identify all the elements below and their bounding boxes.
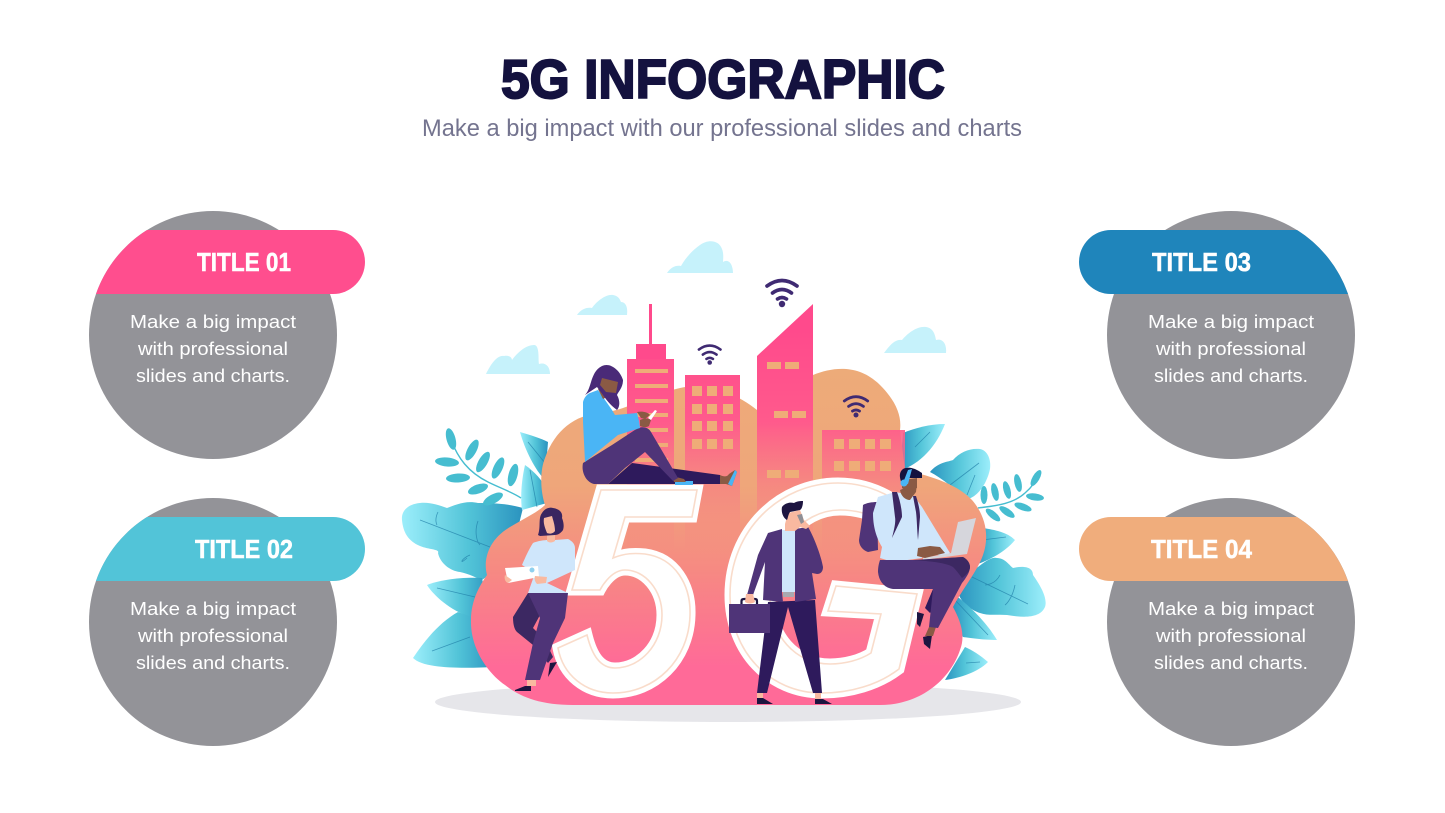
leaves: right [900,424,1046,680]
panel: title 02 [89,498,365,746]
icon: wifi large [767,280,797,307]
subtitle: Make a big impact with our professional slides and charts [422,115,1022,142]
title: 5G INFOGRAPHIC [501,48,945,110]
big numeral G [730,483,917,693]
text block: title 02: slides and charts. [136,652,290,673]
buildings [627,304,905,565]
text block: title 02: with professional [137,625,288,646]
text block: title 01: Make a big impact [130,311,296,332]
text block: title 02: Make a big impact [130,598,296,619]
person: woman sitting with phone [583,365,737,486]
icon: wifi medium [844,397,868,417]
text block: title 03: Make a big impact [1148,311,1314,332]
text block: title 02 [130,598,296,673]
icon: wifi small [699,346,720,365]
panel: title 01 [89,211,365,459]
panel: title 03 [1079,211,1355,459]
panel: title 04 [1079,498,1355,746]
icon: clouds [486,241,946,374]
text block: title 04: slides and charts. [1154,652,1308,673]
text block: title 04: with professional [1155,625,1306,646]
big numeral 5 [558,490,697,693]
heading: title 01: TITLE 01 [197,247,291,277]
building windows [635,362,891,478]
heading: title 04: TITLE 04 [1151,534,1252,564]
person: man with laptop [859,468,976,649]
text block: title 01: with professional [137,338,288,359]
leaves: left [402,427,548,668]
text block: title 04: Make a big impact [1148,598,1314,619]
text block: title 03 [1148,311,1314,386]
heading: title 03: TITLE 03 [1152,247,1251,277]
left branch [435,427,521,508]
heading: title 02: TITLE 02 [195,534,293,564]
text block: title 03: with professional [1155,338,1306,359]
text block: title 03: slides and charts. [1154,365,1308,386]
ground shadow [435,682,1021,722]
background cloud [471,369,986,705]
person: man with briefcase [729,501,832,704]
right branch [978,468,1044,523]
illustration: 5G city [402,241,1046,722]
person: woman with tablet [505,508,575,691]
text block: title 01: slides and charts. [136,365,290,386]
text block: title 01 [130,311,296,386]
text block: title 04 [1148,598,1314,673]
